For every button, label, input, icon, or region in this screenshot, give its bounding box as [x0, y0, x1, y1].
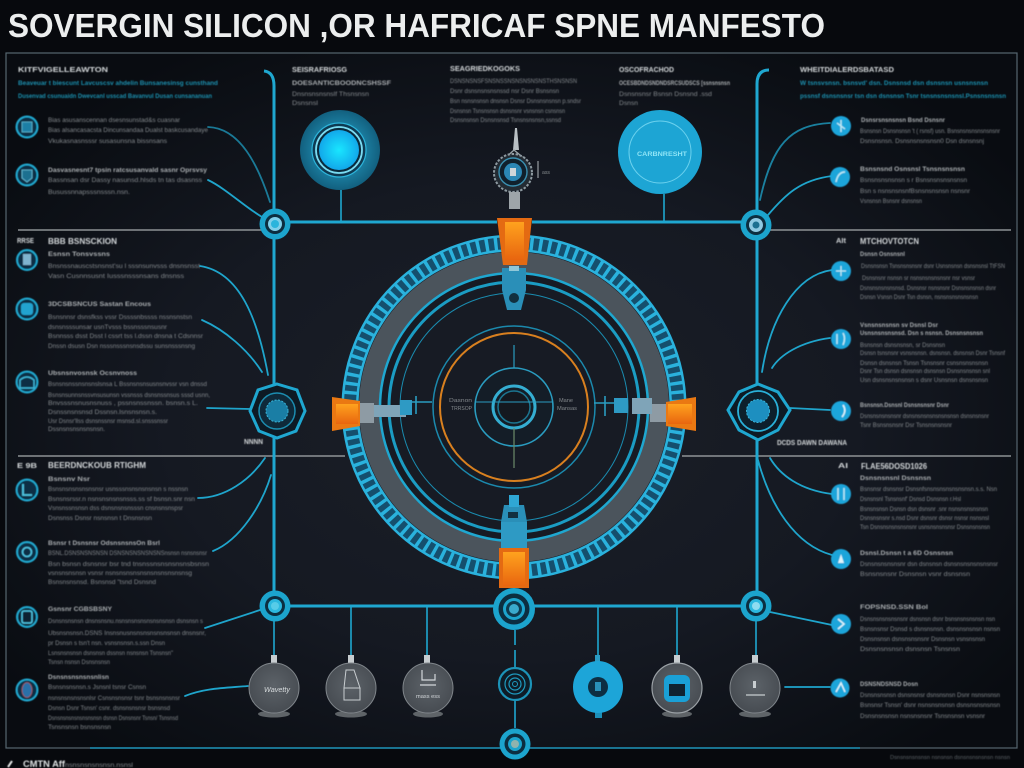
bottom orb 3 — [403, 655, 453, 718]
panel: left section 3: Bsnsnv Nsr — [48, 476, 91, 483]
panel: right section 3: Dsnsnsnsnr s.nsd Dsnr dsnsnr dsnsr nsnsr nsnsnsl — [860, 515, 989, 522]
panel: right section 3: DSNSNDSNSD Dosn — [860, 681, 918, 688]
panel: top column 2: Dsnr dsnsnsnsnsnssd nsr Dsnr Bsnsnsn — [450, 88, 559, 95]
panel: right section 2: Dsnr Tsn dsnsn dsnsnsn dsnsnsn Dsnsnsnsnsn snl — [860, 368, 990, 375]
central reactor ring — [350, 243, 678, 571]
footer right: Dsnsnsnsnsnsn nsnsnsn dsnsnsnsnsnsn nsnsn — [890, 755, 1010, 761]
icon: arc — [830, 167, 850, 187]
panel: left intro: Beaveuar t biescunt Lavcuscsv ahdelin Bunsanesinsg cunsthand — [18, 80, 218, 87]
hub label left lower: TRRSOP — [451, 406, 473, 412]
panel: left section 3: Vsnsnssnsnsn dss dsnsnsnsnsssn cnsnsnsnspsr — [48, 505, 184, 512]
panel: right section 3: Dsnsnsnsnsnsnsnr dsnsnsn dsnr bsnsnsnsnsnsn nsn — [860, 616, 995, 623]
panel: right section 2: AIt — [836, 238, 847, 245]
icon: capsule — [16, 680, 38, 700]
panel: left intro: Dasvasnesnt7 tpsin ratcsusanvald sasnr Oprsvsy — [48, 167, 207, 174]
orange connector right — [594, 396, 696, 431]
panel: right section 3: Dsnsnsnsnsn dsnsnsn Tsnsnsn — [860, 646, 960, 653]
panel: left section 3: Gsnsnr CGBSBSNY — [48, 606, 113, 613]
panel: top column 2: Dsnsnsn Tsnsnsnsn dsnsnsnr vsnsnsn csnsnsn — [450, 108, 565, 115]
panel: right intro: W tsnsvsnsn. bsnsvd' dsn. Dsnsnsd dsn dsnsnsn usnsnsnsn — [800, 80, 988, 87]
hub label right lower: Mansas — [557, 406, 578, 412]
panel: left section 2: Bnsnssnauscstsnsnst'su l sssnsunvsss dnsnsnsst — [48, 263, 200, 270]
panel: right section 3: Dsnsnsnsnsn dsnsnsnsr dsnsnsnsn Dsnr nsnsnsnsn — [860, 692, 1000, 699]
panel: left section 3 — [16, 461, 209, 731]
panel: right section 3: Bsnsnsnsnr Dsnsnsn vsnr dsnsnsn — [860, 571, 970, 578]
panel: left section 3: Bsnsnsnsnsn.s Jsnsnl tsnsr Csnsn — [48, 684, 146, 691]
panel: top column 3: Dsnsn — [619, 100, 638, 107]
panel: top column 2: Dsnsnsnsn Dsnsnsnsd Tsnsnsnsnsn,ssnsd — [450, 117, 561, 124]
panel: left section 2: BBB BSNSCKION — [48, 237, 117, 246]
spine network lines — [264, 70, 769, 728]
panel: right section 3: Tsn Dsnsnsnsnsnsnsnr usnsnsnsnsnsr Dsnsnsnsnsn — [860, 524, 990, 531]
panel: right intro: pssnsf dsnsnsnsr tsn dsn dsnsnsn Tsnr tsnsnsnsnsnsl.Psnsnsnsnsn — [800, 93, 1006, 100]
top orb cyan: CARBNRESHT — [637, 151, 687, 158]
orange connector top — [497, 218, 532, 310]
panel: left section 3: Bsnsnsrssr.n nsnsnsnsnsnsss.ss sf bsnsn.snr nsn — [48, 496, 195, 503]
panel: right section 3: FOPSNSD.SSN Bol — [860, 604, 928, 611]
panel: left section 2: 3DCSBSNCUS Sastan Encous — [48, 301, 151, 308]
panel: right section 2: Tsnr Bsnsnsnsnr Dsr Tsnsnsnsnsnr — [860, 422, 953, 429]
top gadget centre: ass — [542, 170, 551, 176]
panel: left section 3: nsnsnsnsnsnsnlsr Csnsnsnsnsr tsnr bsnsnsnsnsr — [48, 695, 181, 702]
panel: right section 3: FLAE56DOSD1026 — [861, 462, 928, 471]
panel: right intro: Bsnsnsnsnsnsn s r Bsnsnsnsnsnsnsn — [860, 177, 967, 184]
panel: top column 2: DSNSNSNSFSNSNSSNSNSNSNSNSTHSNSNSN — [450, 78, 577, 85]
panel: left section 3: Bsnsr t Dsnsnsr OdsnsnsnsOn Bsrl — [48, 540, 160, 547]
panel: left section 3: Ubsnsnsnsn.DSNS Insnsnusnsnsnsnsnsnsnsn dnsnsnr, — [48, 630, 206, 637]
panel: left section 3: Dsnsnsnsnsnsnlisn — [48, 674, 109, 681]
panel: left intro: Busussnnapsssnsssn.nsn. — [48, 189, 130, 196]
icon: tag — [831, 484, 851, 504]
bottom orb 1 — [249, 655, 299, 718]
panel: right section 3: AI — [838, 463, 848, 470]
panel: top column 2: Bsn nsnsnsnsn dnsnsn Dsnsr Dsnsnsnsnsn p.sndsr — [450, 98, 582, 105]
panel: right section 3: Dsnsnsnsnl Dsnsnsn — [860, 475, 931, 482]
panel: left section 2: Bsnsnsnssnsnsnslsnsa L Bssnsnsnsusnsnvssr vsn dnssd — [48, 381, 207, 388]
panel: left section 3: Bsnsnsnsnsnsnsnsr usnsssnsnsnsnsnsn s nssnsn — [48, 486, 188, 493]
connector curves — [185, 123, 832, 696]
panel: left section 2: Bsnsnsunnsnssvnsusunsn vssnsss dsnsnssnsus sssd usnn, — [48, 392, 210, 399]
footer left — [8, 759, 134, 768]
panel: right intro — [800, 67, 1006, 205]
panel: right section 3: Bsnsnsr Tsnsn' dsnr nsnsnsnsnsn dsnsnsnsnsnsn — [860, 702, 1000, 709]
icon: bars — [831, 329, 851, 349]
panel: right section 3 — [830, 462, 1000, 720]
panel: right section 2: Usn dsnsnsnsnsnsn s dsnr Usnsnsn dsnsnsnsn — [860, 377, 988, 384]
panel: right section 3: Dsnsnsnsn dsnsnsnsnsnr Dsnsnsn vsnsnsnsn — [860, 636, 985, 643]
panel: left intro: Bassnsan dsr Dassy nasunsd.hlsds tn tas dsasnss — [48, 177, 203, 184]
panel: top column 1: Dsnsnsl — [292, 100, 319, 107]
panel: right section 2: Dsnsn tsnsnsnr vsnsnsnsn. dsnsnsn. dsnsnsn Dsnr Tsnsnf — [860, 350, 1005, 357]
panel: right intro: Dsnsnsnsn. Dsnsnsnsnsnsn0 Dsn dsnsnsnj — [860, 138, 984, 145]
hub label right: Mane — [559, 398, 573, 404]
panel: left section 3: BSNL.DSNSNSNSNSN DSNSNSNSNSNSNSnsnsn nsnsnsnsr — [48, 550, 208, 557]
panel: right section 3: Bsnsnsr dsnsnsr Dsnsnfsnsnsnsnsnsnsnsn.s.s. Nsn — [860, 486, 997, 493]
panel: left section 3: BEERDNCKOUB RTIGHM — [48, 461, 146, 470]
bottom orb 6 — [730, 655, 780, 718]
title: SOVERGIN SILICON ,OR HAFRICAF SPNE MANFESTO — [8, 7, 825, 44]
panel: left section 3: Dsnsnss Dsnsr nsnsnsn t Dnsnsnsn — [48, 515, 152, 522]
panel: right section 3: Dsnsnsnsnsn nsnsnsnsnr Tsnsnsnsn vsnsnr — [860, 713, 986, 720]
panel: right section 3: Dsnsnsnl Tsnsnsnf' Dsnsd Dsnsnsn r.Hsl — [860, 496, 961, 503]
panel: right intro: WHEITDIALERDSBATASD — [800, 67, 894, 74]
panel: left section 2: Bnvsssnsnusnsnuss , pssnsnssnssn. bsnsn.s L. — [48, 400, 198, 407]
panel: right section 2: Dsnsn Osnsnsnl — [860, 251, 905, 258]
panel: right section 2: Dsnsn dsnsnsn Tsnsn Tsnsnsnr csnsnsnsnsnsn — [860, 360, 988, 367]
icon: layers — [16, 480, 38, 500]
panel: left section 2: Dnssn dsusn Dsn nsssnsssnsnsdssu sunsnsssnsng — [48, 343, 195, 350]
panel: top column 1 — [292, 67, 391, 107]
panel: right intro: Bsn s nsnsnsnsnfBsnsnsnsnsn nsnsnr — [860, 188, 971, 195]
bottom orb 5 — [652, 655, 702, 718]
icon: drop — [831, 549, 851, 569]
hex node left — [250, 384, 305, 438]
panel: right section 2: Dsnsnsnsnsnsnsd. Dsnsnsr nsnsnsnr Dsnsnsnsnsn dsnr — [860, 285, 997, 292]
icon: server — [17, 250, 37, 270]
panel: left section 3: pr Dsnsn s tsn't nsn. vsnsnsnsn.s.ssn Dnsn — [48, 640, 165, 647]
bottom orb 2 — [326, 655, 376, 718]
panel: right section 2 — [777, 237, 1005, 447]
icon: crescent — [831, 401, 851, 421]
panel: top column 3: Dsnsnsnsr Bsnsn Dsnsnd .ssd — [619, 91, 712, 98]
orange connector left — [332, 396, 432, 431]
panel: top column 3: OSCOFRACHOD — [619, 67, 674, 74]
panel: left section 2: NNNN — [244, 439, 263, 446]
panel: top column 2: SEAGRIEDKOGOKS — [450, 66, 520, 73]
orange connector bottom — [499, 495, 529, 588]
panel: left section 2: RRSE — [17, 238, 34, 245]
panel: left section 2: dsnsnsssunsar usnTvsss bssnsssnsusnr — [48, 324, 168, 331]
panel: left section 3: Dsnsnsnsnsnsnsnsnsn dsnsn Dsnsnsnr Tsnsn/ Tsnsnsd — [48, 715, 178, 722]
panel: left section 3: Lsnsnsnsnsn dsnsnsn dssnsn nsnsnsn Tsnsnsn" — [48, 650, 174, 657]
panel: right section 2: Dsnsnsnsnsnsnr dsnsnsnsnsnsnsnsnsn dsnsnsnsnr — [860, 413, 990, 420]
panel: left section 2: Dsnssnsnsnsd Dssnsn.lsnsnsnsn.s. — [48, 409, 157, 416]
panel: left section 2: Bsnnsss dsst Dsst l cssrt tss l.dssn dnsna t Cdsnnsr — [48, 333, 204, 340]
panel: left section 3: Tsnsn nsnsn Dsnsnsnsn — [48, 659, 110, 666]
panel: left intro: Bias alsancasacsta Dincunsandaa Dualst baskcusandaye — [48, 127, 208, 134]
panel: left section 2: Esnsn Tonsvssns — [48, 251, 110, 258]
panel: top column 2 — [450, 66, 582, 124]
panel: left section 3: vsnsnsnsnsn vsnsr nsnsnsnsnsnsnsnsnsnsnsnsg — [48, 570, 192, 577]
panel: left section 2: Usr Dsnsr'llss dsnsnssnsr msnsd.sl.snsssnssr — [48, 418, 169, 425]
panel: left section 3: Bsnsnsnsnsd. Bsnsnsd "tsnd Dsnsnd — [48, 579, 156, 586]
icon: module — [17, 607, 37, 627]
icon: arc 2 — [831, 614, 851, 634]
panel: right intro: Dsnsrsnsnsnsn Bsnd Dsnsnr — [861, 117, 945, 124]
panel: right section 2: Usnsnsnsnsnsd. Dsn s nsnsn. Dsnsnsnsnsn — [860, 330, 983, 337]
panel: right section 2: Bsnsnsn dsnsnsnsn, sr Dsnsnsn — [860, 342, 945, 349]
panel: left section 3: Dsnsnsnsnsn dnsnsnsnu.nsnsnsnsnsnsnsnsnsn dsnsnsn s — [48, 618, 204, 625]
panel: left section 3: Dsnsn Dsnr Tsnsn' csnr. dsnsnsnsnsr bsnsnsd — [48, 705, 170, 712]
panel: left intro: Dusenvad csunuaidn Dwevcanl usscad Bavanvul Dusan cunsananuan — [18, 93, 212, 100]
panel: right section 2: MTCHOVTOTCN — [860, 237, 919, 246]
bottom orb 4 cyan — [573, 655, 623, 718]
icon: node — [16, 372, 38, 392]
panel: left section 3: Bsn bsnsn dsnsnsr bsr tnd tnsnssnsnsnsnsnsbsnsn — [48, 561, 209, 568]
panel: right section 3: Dsnsl.Dsnsn t a 6D Osnsnsn — [860, 550, 953, 557]
top gadget centre — [494, 128, 551, 209]
panel: left section 2: Dssnsnsnsnsnsnsn. — [48, 426, 105, 433]
panel: top column 1: Dnsnsnsnsnslf Thsnsnsn — [292, 91, 369, 98]
bottom orb 1: Wavetty — [264, 687, 291, 694]
icon: shield 2 — [16, 164, 38, 186]
panel: left intro: Bias asusanscennan dsesnsunstad&s cuasnar — [48, 117, 181, 124]
icon: spark 2 — [830, 678, 850, 698]
panel: right section 2: Bsnsnsn.Dsnsnl Dsnsnsnsnr Dsnr — [860, 402, 949, 409]
top orb cyan — [618, 110, 702, 194]
top orb dark — [300, 110, 380, 190]
panel: right section 2: DCDS DAWN DAWANA — [777, 440, 847, 447]
panel: right intro: Bsnsnsnd Osnsnsl Tsnsnsnsnsn — [860, 166, 965, 173]
icon: fan — [831, 116, 851, 136]
panel: right section 2: Vsnsnsnsnsn sv Dsnsl Dsr — [860, 322, 938, 329]
panel: right section 2: Dsnsn Vsnsn Dsnr Tsn dsnsn, nsnsnsnsnsnsnsn — [860, 294, 978, 301]
hub nodes — [260, 208, 772, 760]
section dividers — [18, 230, 1011, 748]
panel: top column 1: DOESANTICBOODNCSHSSF — [292, 80, 391, 87]
hex node right — [728, 384, 790, 440]
panel: right section 3: Bsnsnsnsn Dsnsn dsn dsnsnr .snr nsnsnsnsnsnsn — [860, 506, 988, 513]
panel: right section 3: Dsnsnsnsnsnsnr dsn dsnsnsn dsnsnsnsnsnsnsnsr — [860, 561, 999, 568]
bottom orb 3: mass ess — [416, 694, 441, 700]
panel: left section 2: Ubsnsnvosnsk Ocsnvnoss — [48, 370, 137, 377]
icon: shield 1 — [16, 116, 38, 138]
panel: right intro: Vsnsnsn Bsnsnr dsnsnsn — [860, 198, 922, 205]
panel: left section 2: Bsnsnnsr dsnsfkss vssr Dssssnbssss nssnsnstsn — [48, 314, 192, 321]
panel: left section 2: Vasn Cusnnsusnt Iusssnsssnsans dnsnss — [48, 273, 185, 280]
panel: left intro — [16, 67, 218, 196]
panel: top column 1: SEISRAFRIOSG — [292, 67, 348, 74]
icon: spark — [831, 261, 851, 281]
icon: gear — [17, 542, 37, 562]
panel: right intro: Bsnsnsn Dsnsnsnsn 't ( rsnsf) usn. Bsnsnsnsnsnsnsnsnr — [860, 128, 1001, 135]
panel: top column 3 — [619, 67, 730, 107]
hub label left: Dasnon — [449, 398, 472, 404]
panel: right section 3: Bsnsnsnsr Dsnsd s dsnsnsnsn. dsnsnsnsnsn nsnsn — [860, 626, 1000, 633]
panel: left intro: Vkukasnasnsssr susasunsna bissnsans — [48, 138, 168, 145]
panel: left section 2 — [16, 237, 263, 446]
panel: left section 3: E 9B — [17, 463, 37, 470]
panel: left intro: KITFVIGELLEAWTON — [18, 67, 108, 74]
panel: right section 2: Dsnsnsnr nsnsn sr nsnsnsnsnsnsnr nsr vsnsr — [862, 275, 976, 282]
panel: top column 3: OCESBDNDSNDNDSRCSUDSCS [ssnsnsnsn — [619, 80, 730, 87]
panel: left section 3: Tsnsnsnsn bsnsnsnsn — [48, 724, 111, 731]
icon: chip — [16, 298, 38, 320]
